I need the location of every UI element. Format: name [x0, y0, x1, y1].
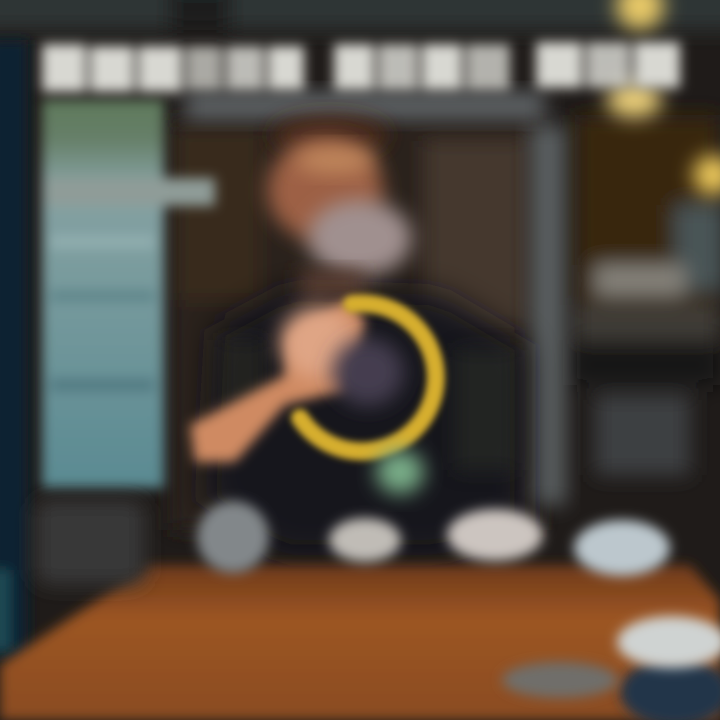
right shelving — [570, 115, 720, 475]
background: upper wall band — [0, 0, 720, 530]
arm — [190, 300, 365, 462]
torso — [205, 290, 525, 555]
foreground bowl — [502, 616, 720, 720]
left dark object — [35, 500, 145, 585]
ceiling lights — [606, 0, 720, 195]
left window panel — [42, 100, 215, 488]
title band — [42, 42, 680, 120]
table — [0, 565, 720, 720]
face covering — [308, 200, 412, 276]
cup 2 — [329, 518, 401, 562]
title (illegible in the reference, shown as blurred letter blocks) — [42, 42, 680, 92]
neck — [300, 270, 365, 296]
cup 4 — [574, 520, 670, 576]
green pendant — [376, 450, 424, 494]
grey column — [530, 125, 566, 505]
person — [190, 115, 525, 555]
cup 3 — [447, 509, 543, 561]
cups — [197, 501, 670, 576]
phone-like purple object — [332, 338, 404, 406]
cup 1 — [197, 501, 269, 573]
left dark navy strip — [0, 40, 28, 660]
yellow ring — [300, 303, 436, 451]
head — [267, 138, 383, 242]
hair — [272, 115, 388, 155]
shirt speckles — [220, 340, 515, 470]
